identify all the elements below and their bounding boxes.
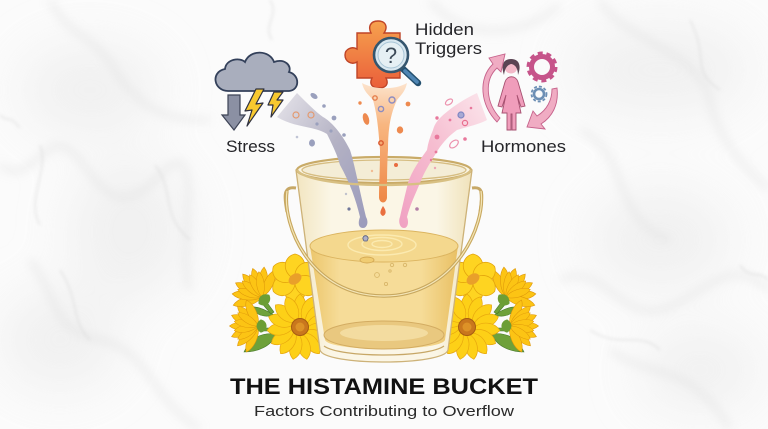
- label: Hormones: Hormones: [481, 138, 566, 156]
- label: Hidden Triggers: Hidden: [415, 21, 474, 39]
- stream: hidden triggers: [358, 83, 410, 216]
- lower highlight surface: [324, 321, 444, 349]
- big gear: [532, 56, 552, 78]
- magnifier handle: [402, 68, 418, 83]
- icon: stress storm cloud: [215, 53, 297, 130]
- label: Stress: Stress: [226, 138, 275, 156]
- leaves and stems: [244, 297, 276, 352]
- lightning bolts: [245, 89, 283, 126]
- rim: [297, 157, 471, 183]
- flowers: left cluster: [220, 254, 333, 361]
- down arrow: [222, 95, 245, 130]
- small gear: [534, 89, 544, 99]
- woman: [498, 77, 525, 130]
- label: Hidden Triggers: Triggers: [415, 40, 482, 58]
- cloud: [215, 53, 297, 91]
- liquid: [310, 246, 458, 349]
- question mark: ?: [385, 43, 397, 68]
- puzzle piece: [345, 21, 400, 88]
- stream: hormones: [399, 93, 487, 228]
- bucket: [285, 157, 482, 362]
- cycle arrows: [483, 54, 557, 129]
- handle ears: [285, 188, 482, 212]
- title: THE HISTAMINE BUCKET: [230, 374, 539, 399]
- icon: hidden triggers puzzle with magnifier: [345, 21, 418, 88]
- magnifier lens: [374, 38, 408, 72]
- head and hair: [504, 60, 518, 74]
- glass body: [296, 170, 472, 362]
- flowers: right cluster: [434, 254, 548, 361]
- bucket front rim: [297, 170, 471, 185]
- thick glass base edge: [324, 346, 444, 355]
- bucket handle: [286, 191, 482, 296]
- bubbles: [375, 263, 407, 286]
- ripples: [348, 235, 416, 255]
- leaves and stems: [492, 297, 524, 352]
- stream: stress: [277, 92, 367, 228]
- icon: hormones woman with gears: [483, 53, 557, 130]
- liquid surface: [310, 230, 458, 262]
- subtitle: Factors Contributing to Overflow: [254, 403, 514, 420]
